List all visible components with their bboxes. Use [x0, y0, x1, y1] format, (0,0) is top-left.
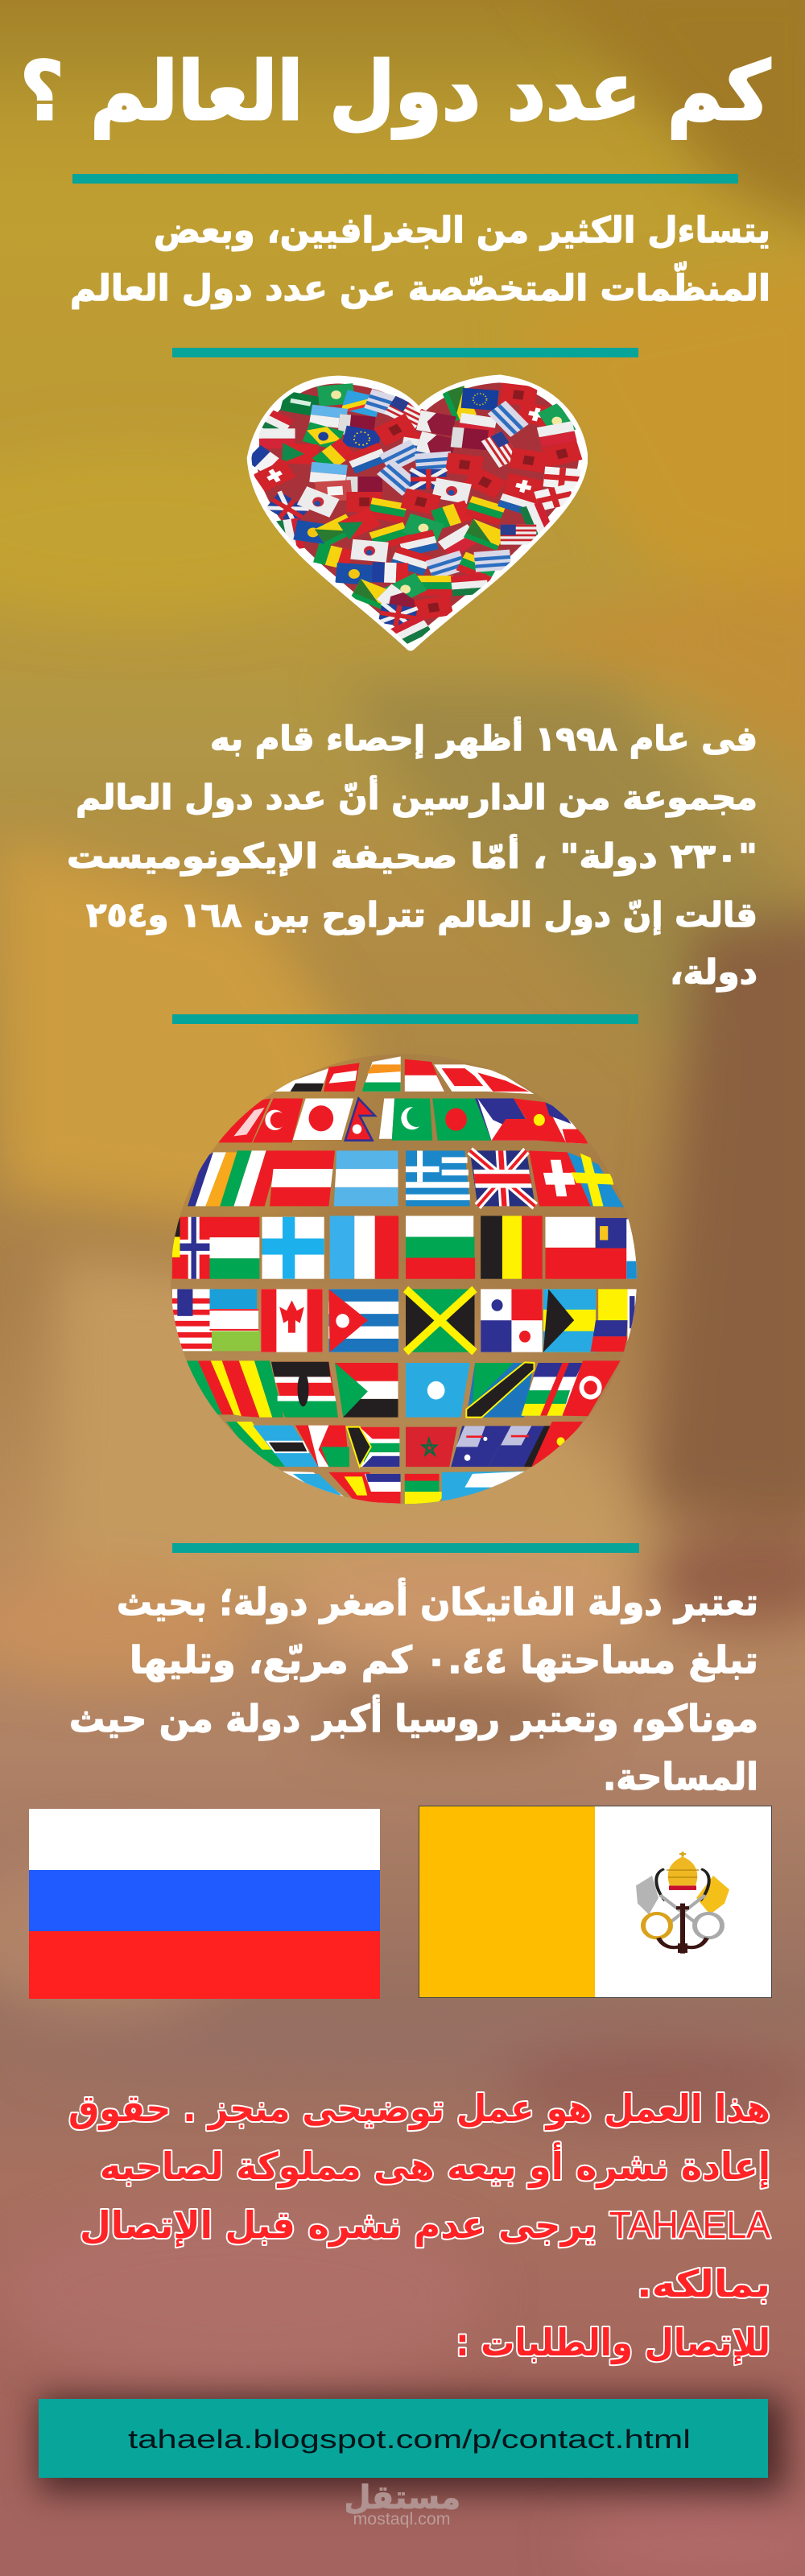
contact url: tahaela.blogspot.com/p/contact.html — [128, 2425, 691, 2454]
third paragraph: تبلغ مساحتها ٠.٤٤ كم مربّع، وتليها — [130, 1638, 758, 1682]
row 5 — [172, 1289, 637, 1352]
row 6 — [186, 1360, 621, 1418]
copyright notice in red — [68, 2087, 772, 2367]
second paragraph: مجموعة من الدارسين أنّ عدد دول العالم — [76, 775, 758, 818]
intro paragraph: يتساءل الكثير من الجغرافيين، وبعض — [154, 210, 770, 251]
rule above heart — [172, 348, 638, 357]
second paragraph: فى عام ١٩٩٨ أظهر إحصاء قام به — [210, 716, 758, 759]
copyright notice in red: TAHAELA يرجى عدم نشره قبل الإتصال — [80, 2203, 770, 2247]
intro paragraph — [70, 210, 770, 310]
rule under title — [72, 174, 738, 184]
copyright notice in red: إعادة نشره أو بيعه هى مملوكة لصاحبه — [100, 2142, 770, 2189]
intro paragraph: المنظّمات المتخصّصة عن عدد دول العالم — [70, 262, 770, 309]
heart of flags — [246, 375, 588, 650]
second paragraph: قالت إنّ دول العالم تتراوح بين ١٦٨ و٢٥٤ — [86, 895, 758, 935]
row 2 — [218, 1099, 588, 1144]
row 8 — [280, 1472, 529, 1505]
row 4 — [172, 1216, 637, 1279]
third paragraph: المساحة. — [603, 1755, 758, 1798]
contact link box — [39, 2399, 768, 2478]
row 3 — [188, 1150, 624, 1208]
second paragraph: "٢٣٠ دولة" ، أمّا صحيفة الإيكونوميست — [67, 834, 758, 877]
copyright notice in red: بمالكه. — [637, 2262, 770, 2306]
row 7 — [226, 1422, 583, 1467]
second paragraph — [67, 716, 758, 993]
row 1 — [272, 1056, 534, 1094]
emblem: keys and tiara — [636, 1852, 729, 1954]
flag: Vatican — [419, 1806, 772, 1998]
second paragraph: دولة، — [670, 952, 758, 993]
third paragraph — [69, 1578, 758, 1798]
flag: Russia — [29, 1809, 711, 1999]
rule above globe — [172, 1014, 638, 1024]
globe of flags — [171, 1055, 637, 1504]
rule above third paragraph — [172, 1543, 639, 1553]
